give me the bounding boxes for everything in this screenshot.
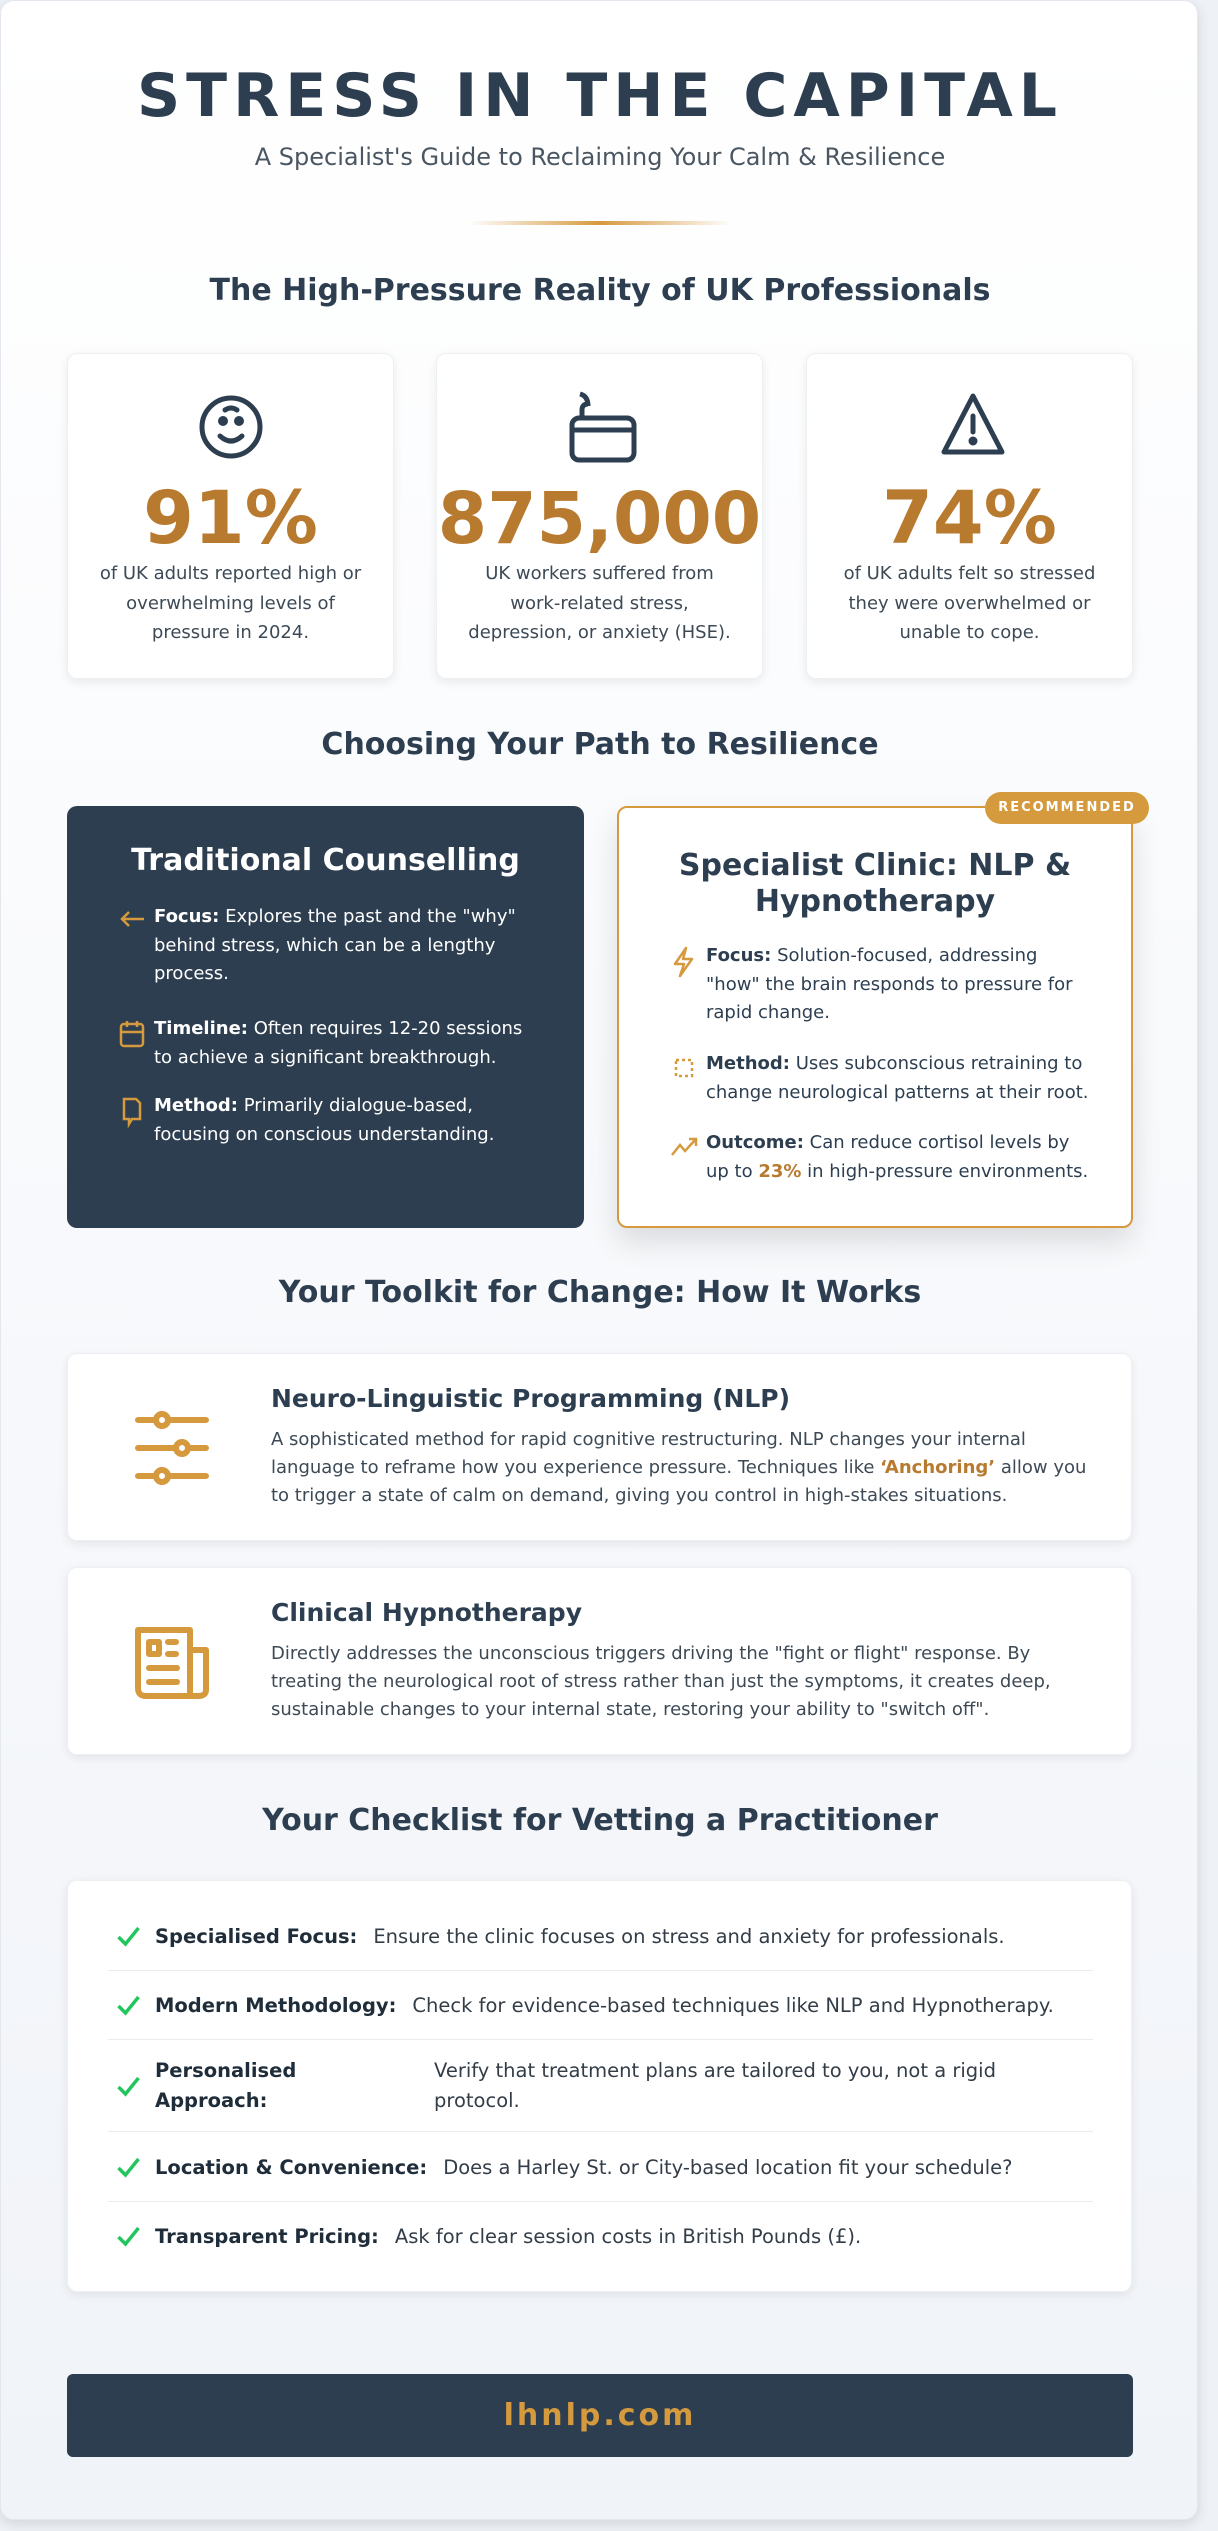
checklist card	[67, 1880, 1132, 2292]
title: STRESS IN THE CAPITAL	[137, 61, 1063, 131]
panel title: Hypnotherapy	[755, 884, 995, 919]
text: of UK adults reported high or overwhelming levels of pressure in 2024.	[100, 563, 361, 643]
text: of UK adults felt so stressed they were overwhelmed or unable to cope.	[844, 563, 1095, 643]
item: outcome: Outcome: Can reduce cortisol levels by up to 23% in high-pressure environments.	[706, 1132, 1088, 1182]
panel title	[679, 848, 1071, 919]
row: specialised focus: Ensure the clinic focuses on stress and anxiety for professionals.	[373, 1924, 1005, 1948]
footer: lhnlp.com	[504, 2398, 696, 2433]
heading: path: Choosing Your Path to Resilience	[321, 727, 879, 762]
icon: newspaper	[135, 1627, 209, 1699]
heading: toolkit: Your Toolkit for Change: How It Works	[279, 1275, 921, 1310]
icon: face	[200, 396, 262, 458]
item: method: Method: Uses subconscious retraining to change neurological patterns at their root.	[706, 1053, 1088, 1102]
stat card 2	[436, 353, 763, 679]
item: focus: Focus: Solution-focused, addressing "how" the brain responds to pressure for rapid change.	[706, 945, 1073, 1023]
item: timeline: Timeline: Often requires 12-20 sessions to achieve a significant breakthrough.	[154, 1018, 522, 1068]
text: UK workers suffered from work-related stress, depression, or anxiety (HSE).	[468, 563, 731, 643]
stat card 1	[67, 353, 394, 679]
badge: recommended	[985, 792, 1149, 824]
row: pricing: Transparent Pricing:	[155, 2224, 379, 2248]
row: location: Does a Harley St. or City-based location fit your schedule?	[443, 2156, 1012, 2178]
title: Neuro-Linguistic Programming (NLP)	[271, 1384, 790, 1413]
item: focus: Focus: Explores the past and the "why" behind stress, which can be a lengthy process.	[154, 906, 516, 984]
row: personalised approach: Personalised Approach:	[155, 2059, 296, 2112]
row: location: Location & Convenience:	[155, 2156, 427, 2178]
heading: checklist: Your Checklist for Vetting a Practitioner	[262, 1803, 938, 1838]
footer	[67, 2374, 1133, 2457]
card: NLP	[67, 1353, 1132, 1541]
icon: sliders	[135, 1411, 209, 1485]
subtitle: A Specialist's Guide to Reclaiming Your Calm & Resilience	[255, 143, 945, 171]
description: A sophisticated method for rapid cognitive restructuring. NLP changes your internal language to reframe how you experience pressure. Techniques like ‘Anchoring’ allow you to trigger a state of calm on demand, giving you control in high-stakes situations.	[271, 1429, 1086, 1506]
card: hypnotherapy	[67, 1567, 1132, 1755]
row: personalised approach	[117, 2059, 996, 2112]
row: modern methodology: Modern Methodology:	[155, 1994, 396, 2016]
row: personalised approach: Verify that treatment plans are tailored to you, not a rigid protocol.	[434, 2059, 996, 2112]
panel title: Traditional Counselling	[131, 843, 520, 878]
number: 74%	[882, 476, 1057, 561]
number: 91%	[143, 476, 318, 561]
row: modern methodology	[117, 1994, 1054, 2016]
panel title: Specialist Clinic: NLP &	[679, 848, 1071, 883]
row: pricing: Ask for clear session costs in British Pounds (£).	[395, 2224, 861, 2248]
badge: recommended: RECOMMENDED	[998, 800, 1136, 815]
divider	[469, 221, 731, 225]
title: Clinical Hypnotherapy	[271, 1598, 582, 1627]
row: location	[117, 2156, 1012, 2178]
panel: specialist clinic	[617, 806, 1133, 1228]
row: pricing	[117, 2224, 861, 2248]
row: specialised focus: Specialised Focus:	[155, 1924, 357, 1948]
item: method: Method: Primarily dialogue-based, focusing on conscious understanding.	[154, 1095, 494, 1144]
stat card 3	[806, 353, 1133, 679]
icon: warning	[942, 394, 1004, 454]
heading: reality: The High-Pressure Reality of UK Professionals	[210, 273, 990, 308]
row: modern methodology: Check for evidence-based techniques like NLP and Hypnotherapy.	[412, 1994, 1054, 2016]
icon: briefcase	[570, 392, 636, 462]
panel: traditional counselling	[67, 806, 584, 1228]
number: 875,000	[438, 477, 761, 560]
description: Directly addresses the unconscious triggers driving the "fight or flight" response. By treating the neurological root of stress rather than just the symptoms, it creates deep, sustainable changes to your internal state, restoring your ability to "switch off".	[271, 1643, 1051, 1720]
